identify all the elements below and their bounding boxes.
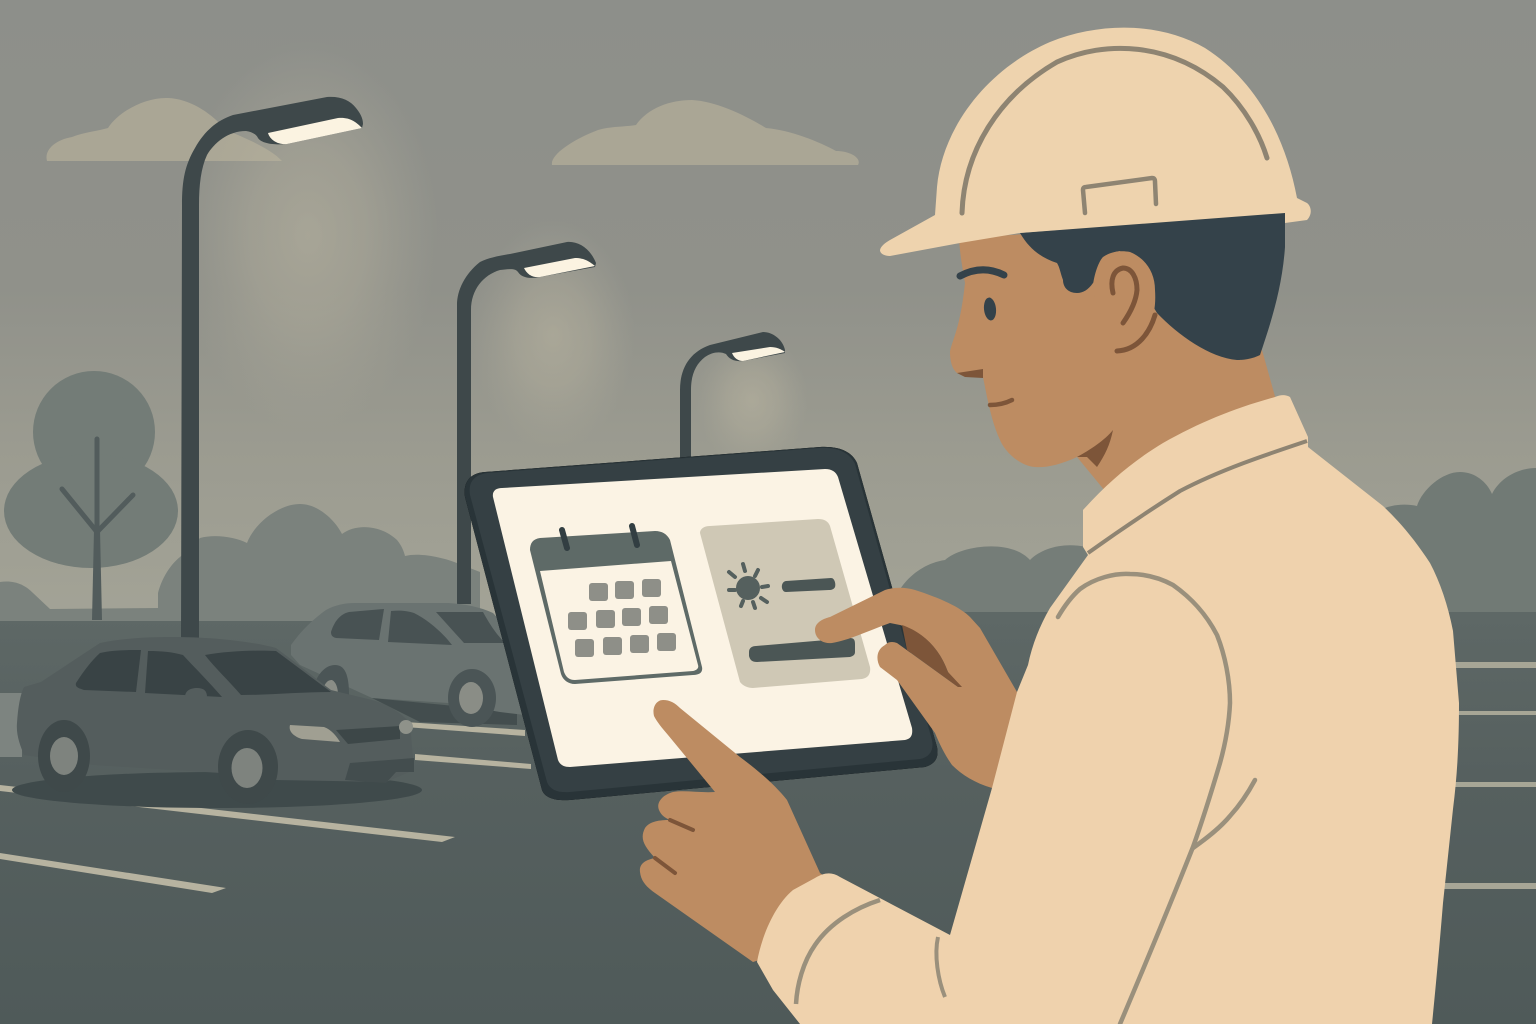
- collar line: [1088, 441, 1307, 553]
- car back: [291, 603, 525, 727]
- sky background: [0, 0, 1536, 640]
- nose shadow: [957, 369, 983, 378]
- mouth: [990, 400, 1012, 405]
- slider bar: [749, 638, 855, 662]
- back hand on tablet: [815, 588, 1040, 800]
- light glow lamp 3: [696, 332, 808, 468]
- lighter ground patch left of car: [0, 693, 22, 757]
- eyebrow: [960, 270, 1004, 276]
- person shirt: [757, 395, 1459, 1024]
- hard hat: [880, 28, 1311, 256]
- background trees right: [1385, 468, 1536, 620]
- tablet: [465, 447, 938, 800]
- eye: [983, 297, 997, 321]
- back car shadow: [372, 698, 517, 725]
- car shadow: [12, 772, 422, 808]
- brightness bar: [782, 578, 835, 592]
- background bushes center: [890, 545, 1100, 620]
- street lamp 1: [181, 97, 363, 640]
- cloud center: [552, 100, 859, 165]
- front hand with pointing finger: [640, 700, 830, 962]
- calendar icon: [530, 526, 702, 684]
- neck and head: [950, 211, 1285, 497]
- arm crease: [936, 937, 945, 997]
- hair: [1020, 211, 1285, 360]
- parking lines right: [1440, 662, 1536, 889]
- jaw shadow: [1077, 430, 1113, 467]
- ear: [1093, 251, 1155, 351]
- elbow crease: [1193, 780, 1255, 848]
- sun icon: [729, 564, 768, 608]
- control panel card: [700, 519, 870, 688]
- tree left: [4, 371, 178, 620]
- bushes behind cars: [158, 504, 480, 622]
- parking lines left: [0, 722, 531, 893]
- parking lot ground: [0, 612, 1536, 1024]
- sleeve seam: [1058, 574, 1230, 1024]
- car front: [17, 637, 414, 804]
- cloud left: [47, 98, 282, 161]
- tablet screen: [493, 469, 912, 767]
- street lamp 3: [680, 332, 785, 460]
- light glow lamp 2: [471, 220, 635, 450]
- light glow lamp 1: [178, 40, 438, 430]
- hedge band and small bush left: [0, 582, 160, 622]
- cuff line: [796, 900, 880, 1004]
- street lamp 2: [457, 242, 596, 604]
